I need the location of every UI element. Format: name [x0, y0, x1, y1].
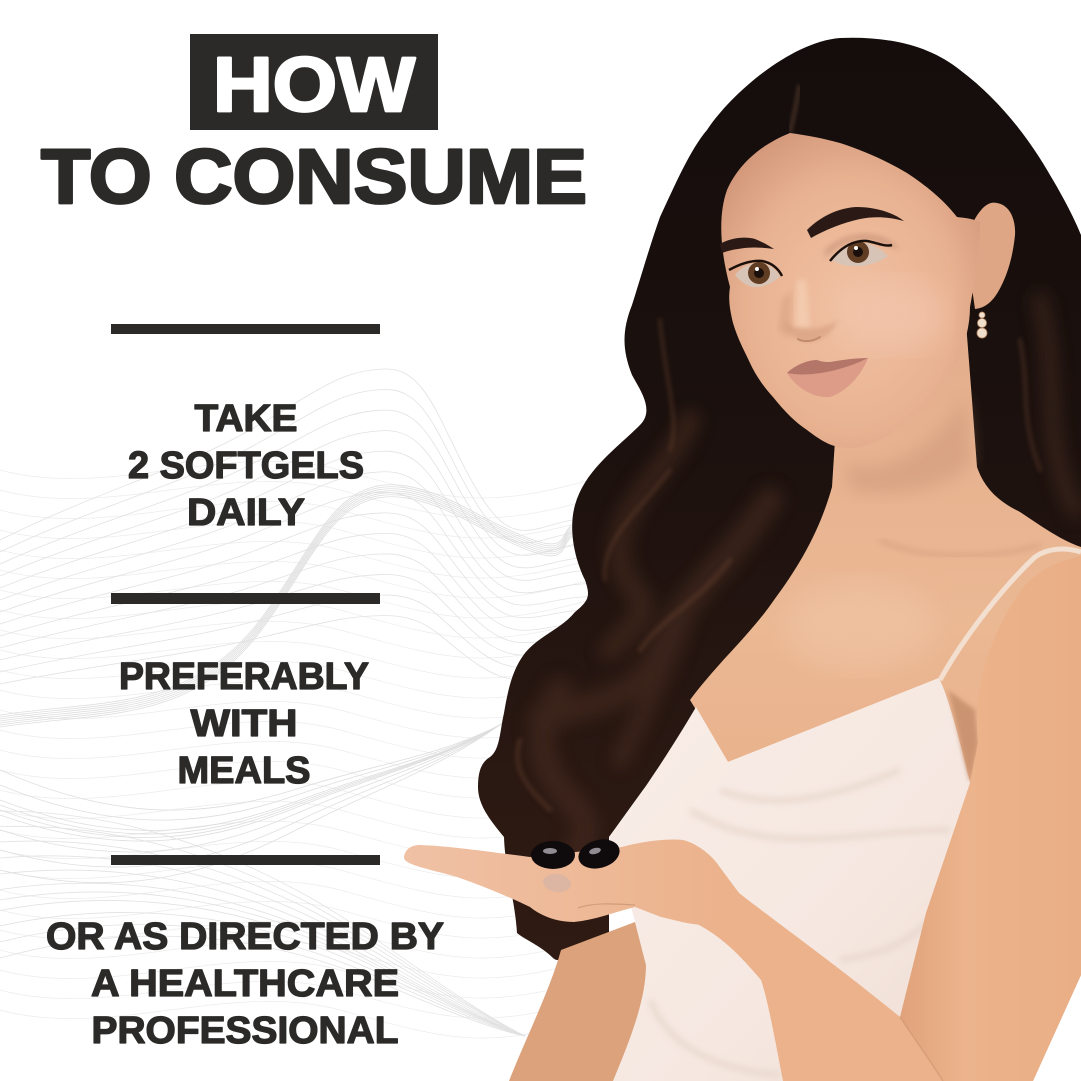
thumbnail [542, 872, 572, 894]
instruction 1: DAILY [187, 492, 305, 534]
hair highlights [517, 85, 1075, 890]
heading [41, 34, 587, 220]
dress [609, 678, 970, 1081]
collarbone shading [880, 540, 1040, 556]
instruction 3: OR AS DIRECTED BY [46, 916, 444, 958]
elbow crease [900, 1017, 943, 1081]
forearm [695, 850, 943, 1081]
instruction 3: PROFESSIONAL [92, 1010, 398, 1052]
nose [778, 280, 838, 342]
left arm [509, 922, 646, 1081]
heading: HOW badge: HOW [213, 42, 415, 128]
instruction 3: A HEALTHCARE [91, 963, 399, 1005]
background: line wave pattern [0, 369, 600, 1081]
right upper arm [900, 556, 1081, 1081]
instruction 2 [111, 593, 380, 792]
eyes [832, 243, 888, 266]
face [720, 133, 1015, 448]
instruction 1: TAKE [194, 398, 298, 440]
instruction 1: 2 SOFTGELS [128, 445, 364, 487]
hair part [790, 85, 799, 133]
face shape [721, 133, 980, 448]
softgels [531, 835, 623, 873]
dress folds [650, 770, 950, 1075]
ear [965, 203, 1015, 309]
lips [787, 358, 868, 397]
hair [478, 38, 1081, 960]
hand [404, 839, 739, 925]
instruction 2: PREFERABLY [119, 656, 369, 698]
earring [977, 312, 987, 338]
instruction 2: MEALS [178, 750, 310, 792]
neck and chest [690, 310, 1081, 1081]
woman illustration [404, 38, 1081, 1081]
neck shadow [845, 395, 972, 494]
heading: TO CONSUME: TO CONSUME [41, 134, 587, 220]
armpit shadow [948, 690, 978, 783]
cheek blush [845, 279, 945, 351]
instruction 2: WITH [190, 703, 298, 745]
eyebrows [807, 207, 904, 238]
dress strap [940, 549, 1081, 680]
instruction 1 [111, 324, 380, 534]
instruction 3 [46, 855, 444, 1052]
chest light [800, 591, 920, 660]
heading: HOW badge [190, 34, 438, 130]
eyeshadow [825, 234, 900, 258]
